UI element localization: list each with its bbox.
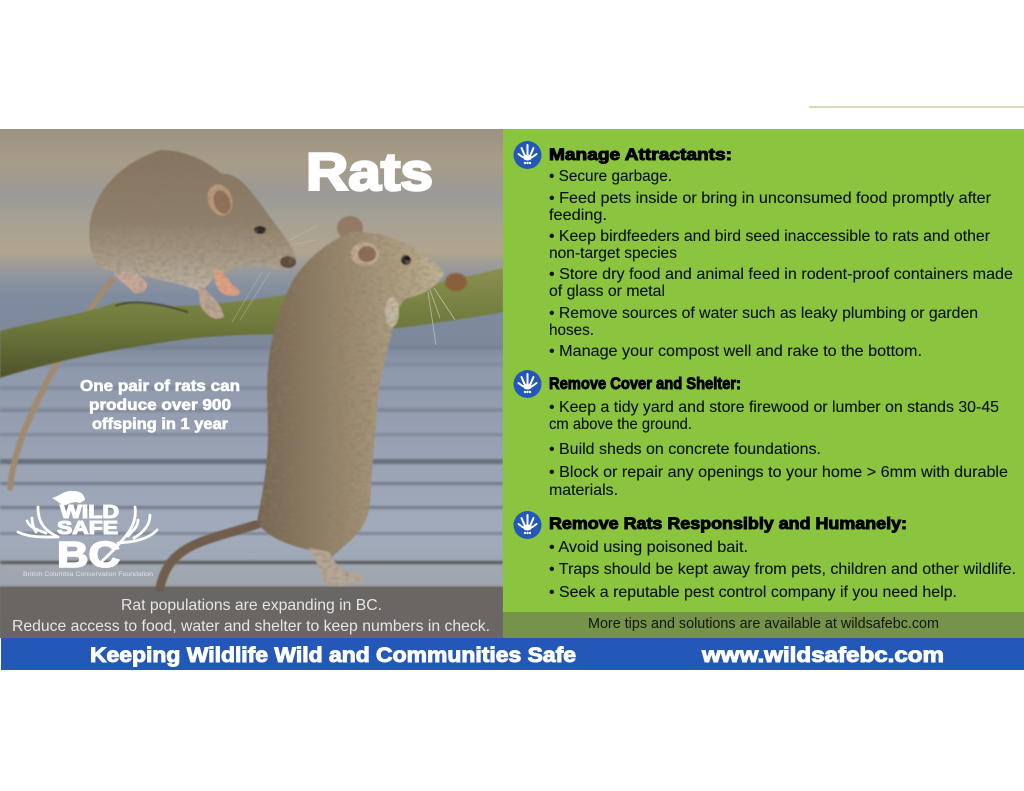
section: manage attractants: • Keep birdfeeders and bird seed inaccessible to rats and other	[549, 228, 991, 245]
section: remove rats responsibly: Remove Rats Responsibly and Humanely:	[549, 514, 907, 533]
right rat ear	[351, 242, 379, 266]
branch	[0, 268, 503, 378]
section: manage attractants	[514, 141, 1013, 360]
logo antlers	[18, 507, 157, 563]
left rat ear	[207, 184, 233, 216]
callout: offspring fact	[80, 378, 240, 433]
right rat chest	[385, 297, 399, 327]
section: manage attractants: • Feed pets inside or bring in unconsumed food promptly after	[549, 190, 992, 207]
left rat back foot	[214, 269, 240, 296]
right rat tail	[160, 524, 258, 588]
logo: WildSafe BC: SAFE	[57, 518, 118, 538]
left rat nose	[280, 256, 296, 268]
icon: paw print	[514, 141, 542, 169]
more tips strip	[503, 612, 1024, 638]
tail of left rat	[10, 280, 112, 488]
section: remove cover and shelter	[514, 370, 1008, 499]
footer banner: www.wildsafebc.com	[701, 644, 944, 667]
right rat leg and foot	[309, 548, 362, 585]
branch knot	[445, 273, 467, 291]
logo: WildSafe BC: WILD	[60, 502, 119, 522]
thin rule top right	[809, 106, 1024, 108]
deck boards	[0, 345, 503, 638]
section: manage attractants: of glass or metal	[549, 283, 665, 300]
title: Rats	[306, 143, 433, 202]
icon: paw print	[514, 370, 542, 398]
panel: tips	[503, 129, 1024, 638]
callout: offspring fact: offsping in 1 year	[92, 416, 228, 433]
section: manage attractants: hoses.	[549, 322, 594, 339]
more tips strip: More tips and solutions are available at wildsafebc.com	[588, 616, 939, 632]
left rat eye	[254, 226, 266, 234]
section: manage attractants: feeding.	[549, 207, 607, 224]
right rat whiskers	[428, 288, 455, 345]
left rat whiskers	[232, 225, 318, 322]
green background	[503, 129, 1024, 638]
section: manage attractants: • Secure garbage.	[549, 168, 672, 185]
right rat far ear	[337, 216, 363, 240]
section: remove rats responsibly: • Avoid using poisoned bait.	[549, 539, 748, 556]
left rat	[89, 150, 297, 319]
caption strip	[0, 587, 503, 638]
section: manage attractants: • Remove sources of water such as leaky plumbing or garden	[549, 305, 978, 322]
section: remove cover and shelter: materials.	[549, 482, 618, 499]
photo background	[0, 129, 503, 638]
panel: photo of two rats on a branch	[0, 129, 503, 638]
section: remove cover and shelter: • Keep a tidy yard and store firewood or lumber on stands 30-45	[549, 399, 999, 416]
right rat	[257, 216, 444, 585]
section: remove cover and shelter: • Block or repair any openings to your home > 6mm with durable	[549, 464, 1008, 481]
logo: WildSafe BC	[18, 491, 157, 578]
right rat eye	[401, 255, 411, 265]
section: manage attractants: • Store dry food and animal feed in rodent-proof containers made	[549, 266, 1013, 283]
logo animal	[52, 491, 85, 505]
section: remove cover and shelter: Remove Cover and Shelter:	[549, 374, 741, 393]
callout: offspring fact: One pair of rats can	[80, 378, 240, 395]
left rat front leg	[198, 285, 224, 319]
section: remove rats responsibly: • Seek a reputable pest control company if you need help.	[549, 584, 957, 601]
logo: WildSafe BC: British Columbia Conservation Foundation	[23, 572, 153, 578]
caption text: Reduce access to food, water and shelter to keep numbers in check.	[12, 618, 490, 635]
section: remove cover and shelter: • Build sheds on concrete foundations.	[549, 441, 821, 458]
left rat hind paw	[114, 272, 147, 293]
caption text: Rat populations are expanding in BC.	[121, 597, 382, 614]
icon: paw print	[514, 511, 542, 539]
section: manage attractants: non-target species	[549, 245, 677, 262]
section: manage attractants: • Manage your compost well and rake to the bottom.	[549, 343, 922, 360]
section: manage attractants: Manage Attractants:	[549, 145, 732, 164]
section: remove rats responsibly	[514, 511, 1016, 601]
logo: WildSafe BC: BC	[57, 534, 120, 575]
footer banner	[1, 638, 1024, 670]
section: remove cover and shelter: cm above the ground.	[549, 416, 692, 433]
caption text	[12, 597, 490, 635]
callout: offspring fact: produce over 900	[89, 397, 231, 414]
section: remove rats responsibly: • Traps should be kept away from pets, children and other wildlife.	[549, 561, 1016, 578]
footer banner: Keeping Wildlife Wild and Communities Safe	[90, 644, 576, 667]
